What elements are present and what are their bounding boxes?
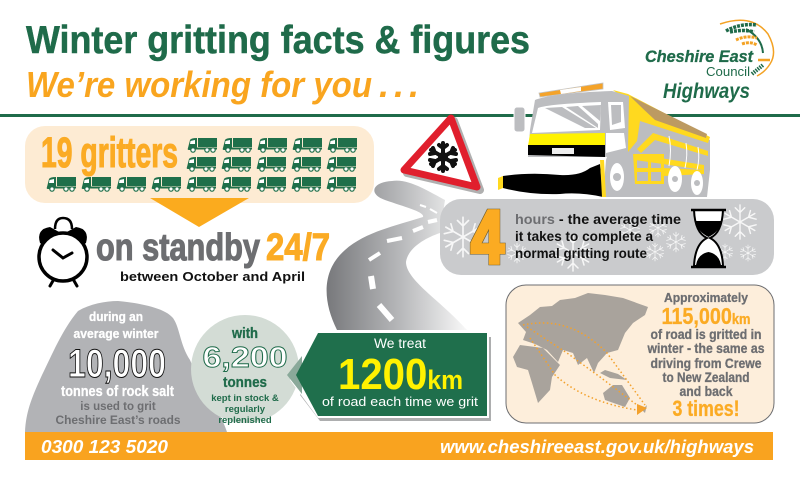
stock text: 6,200 [202,342,288,374]
logo: Cheshire East Council Highways [645,20,774,103]
snowflake [430,143,456,171]
approx text: of road is gritted in [650,326,762,342]
19 gritters heading: 19 gritters [41,129,178,177]
logo name: Cheshire East [645,47,754,66]
4 hours description: it takes to complete a [515,229,653,244]
icon: snow warning sign [404,118,480,190]
footer bar [25,432,773,460]
gritter truck illustration [498,83,710,197]
stock text [202,325,288,426]
panel: 115,000km map [506,285,774,423]
salt mountain [25,301,227,432]
of road: of road each time we grit [322,394,478,409]
arrow down [150,198,249,227]
icon: alarm clock [39,218,87,286]
we treat: We treat [374,336,426,351]
used to grit [56,401,180,427]
used to grit: is used to grit [80,401,156,413]
plough [503,164,603,197]
on standby text: on standby [96,227,260,269]
between October and April: between October and April [120,269,305,284]
stock circle [191,315,299,426]
approx text: to New Zealand [662,369,750,385]
subtitle: . [379,64,389,105]
during an average winter [74,310,159,341]
tipper top yellow [613,90,710,152]
used to grit: Cheshire East’s roads [56,415,180,427]
approx text: 3 times! [672,396,740,421]
tipper load [630,96,707,138]
subtitle: We’re working for you [26,64,372,105]
cab [528,91,629,157]
panel: 1200km [287,330,491,421]
panel: 19 gritters [25,126,374,203]
4 hours description: hours - the average time [515,212,682,227]
stock text: tonnes [223,374,267,391]
gritter truck icons [47,138,357,191]
logo wheat emblem [720,20,774,76]
phone: 0300 123 5020 [41,437,168,457]
snowflake decorations [444,205,756,271]
yellow bumper [528,133,605,146]
panel: 4 hours [440,195,774,280]
approx text: driving from Crewe [650,355,762,371]
stock text: kept in stock & [211,393,279,404]
stock text: regularly [225,404,266,415]
world map [513,293,648,413]
website: www.cheshireeast.gov.uk/highways [440,437,754,457]
stock text: replenished [218,415,272,426]
big 4: 4 [471,195,504,280]
side locker [633,154,664,184]
side rails [635,133,708,170]
logo highways: Highways [663,80,750,103]
road illustration [327,181,467,330]
during an average winter: average winter [74,327,159,341]
1200km: 1200km [338,350,463,399]
approx text: winter - the same as [647,340,765,356]
logo council: Council [706,64,750,79]
subtitle: . [394,64,404,105]
approx text: 115,000km [662,303,750,329]
10,000: 10,000 [68,342,166,386]
during an average winter: during an [89,310,143,324]
tipper body [603,91,710,197]
beacon [539,83,603,97]
wheels [606,158,628,196]
subtitle: . [409,64,419,105]
routes [523,323,645,410]
stock text: with [231,325,258,342]
tonnes of rock salt: tonnes of rock salt [61,384,174,400]
icon: hourglass [691,210,726,267]
4 hours description: normal gritting route [515,246,647,261]
4 hours description [515,212,682,261]
approx text [647,290,765,421]
24/7 text: 24/7 [266,227,330,269]
approx text: and back [680,383,733,399]
title: Winter gritting facts & figures [26,19,530,62]
approx text: Approximately [664,290,749,305]
